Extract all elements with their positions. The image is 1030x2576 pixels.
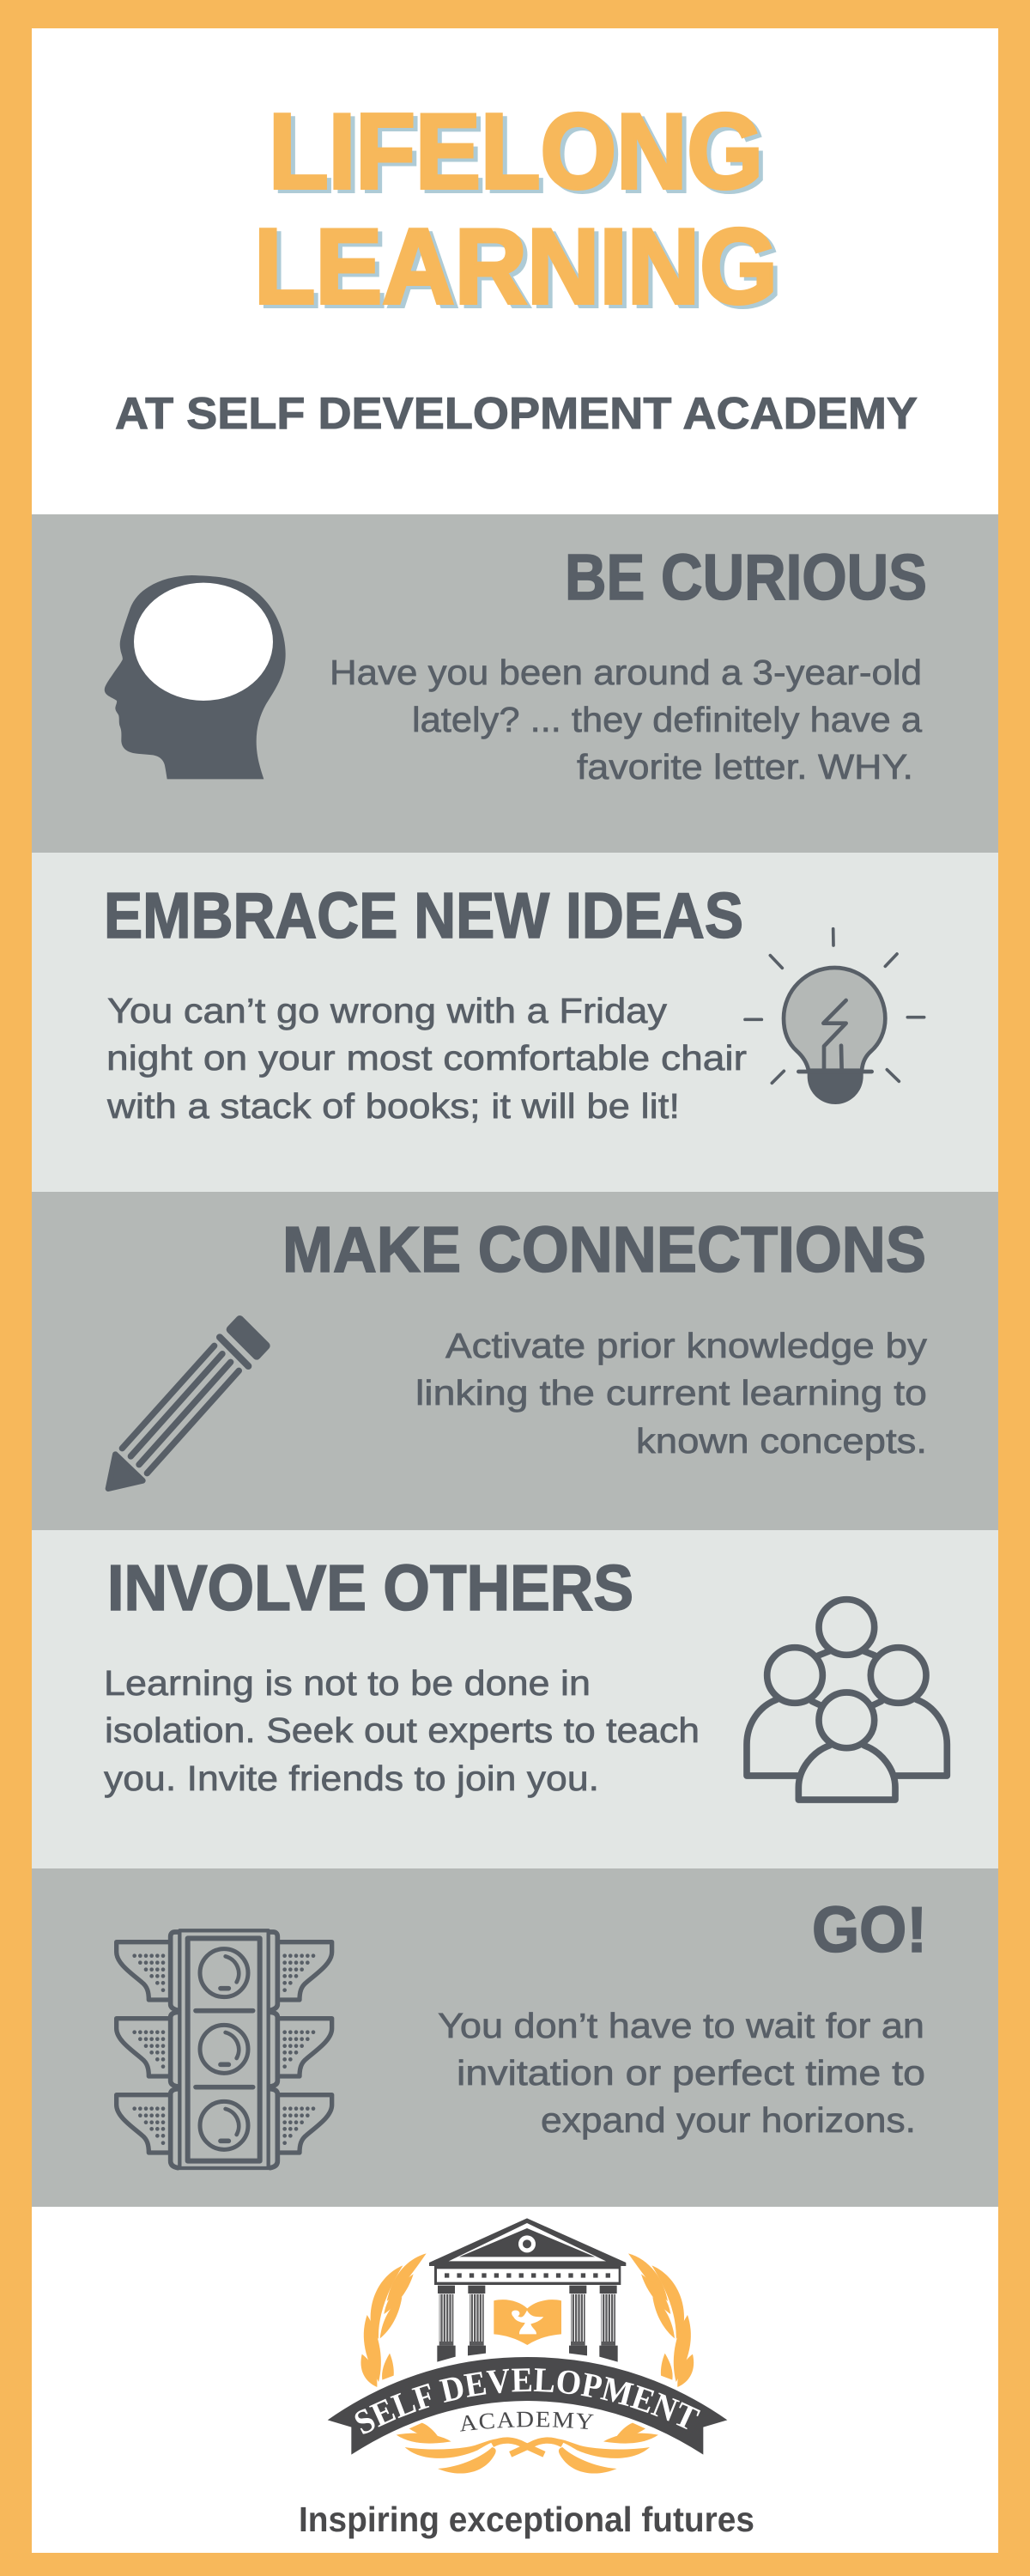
heading: involve others: INVOLVE OTHERS (107, 1552, 633, 1624)
title (254, 93, 782, 330)
text: involve others (104, 1663, 700, 1798)
title: LEARNING (254, 208, 778, 326)
text: make connections (415, 1326, 928, 1461)
text: involve others: Learning is not to be done in (104, 1663, 591, 1703)
logo ribbon (328, 2357, 727, 2455)
heading: go: GO! (812, 1893, 927, 1965)
panel: embrace new ideas (32, 853, 998, 1192)
icon: group of people (747, 1600, 947, 1800)
text: involve others: you. Invite friends to join you. (104, 1759, 599, 1798)
logo wreath (360, 2253, 694, 2474)
text: go: invitation or perfect time to (457, 2053, 925, 2093)
heading: be curious: BE CURIOUS (565, 541, 927, 613)
text: go: You don’t have to wait for an (438, 2006, 924, 2045)
panel: involve others (32, 1530, 998, 1868)
text: involve others: isolation. Seek out experts to teach (105, 1710, 700, 1750)
icon: head (105, 575, 286, 779)
heading: embrace new ideas: EMBRACE NEW IDEAS (104, 879, 743, 951)
text: embrace new ideas: with a stack of books; it will be lit! (106, 1086, 680, 1126)
text: embrace new ideas (106, 991, 747, 1126)
logo: self development academy (328, 2218, 728, 2473)
text: be curious: favorite letter. WHY. (577, 747, 913, 787)
text: embrace new ideas: You can’t go wrong with a Friday (107, 991, 668, 1030)
text: embrace new ideas: night on your most comfortable chair (106, 1038, 747, 1078)
subtitle: AT SELF DEVELOPMENT ACADEMY (115, 389, 918, 439)
panel: go (32, 1868, 998, 2207)
text: make connections: linking the current learning to (415, 1373, 927, 1413)
panel: be curious (32, 514, 998, 853)
icon: traffic light (117, 1930, 332, 2168)
tagline: Inspiring exceptional futures (299, 2500, 754, 2539)
title: LIFELONG (273, 96, 767, 215)
heading: make connections: MAKE CONNECTIONS (282, 1213, 926, 1285)
text: make connections: known concepts. (636, 1421, 927, 1461)
text: go: expand your horizons. (541, 2100, 916, 2140)
text: be curious: lately? ... they definitely have a (412, 700, 922, 739)
text: make connections: Activate prior knowledge by (445, 1326, 928, 1365)
title: LIFELONG (269, 93, 763, 211)
icon: light bulb (745, 929, 924, 1104)
logo academy text: ACADEMY (460, 2411, 594, 2432)
logo ribbon text: SELF DEVELOPMENT (355, 2368, 700, 2434)
text: be curious: Have you been around a 3-year-old (330, 653, 922, 692)
panel: make connections (32, 1192, 998, 1530)
logo temple (429, 2218, 626, 2362)
icon: pencil (108, 1320, 266, 1489)
logo book and lamp (494, 2300, 561, 2345)
title: LEARNING (258, 211, 782, 330)
text: go (438, 2006, 925, 2140)
text: be curious (330, 653, 922, 787)
